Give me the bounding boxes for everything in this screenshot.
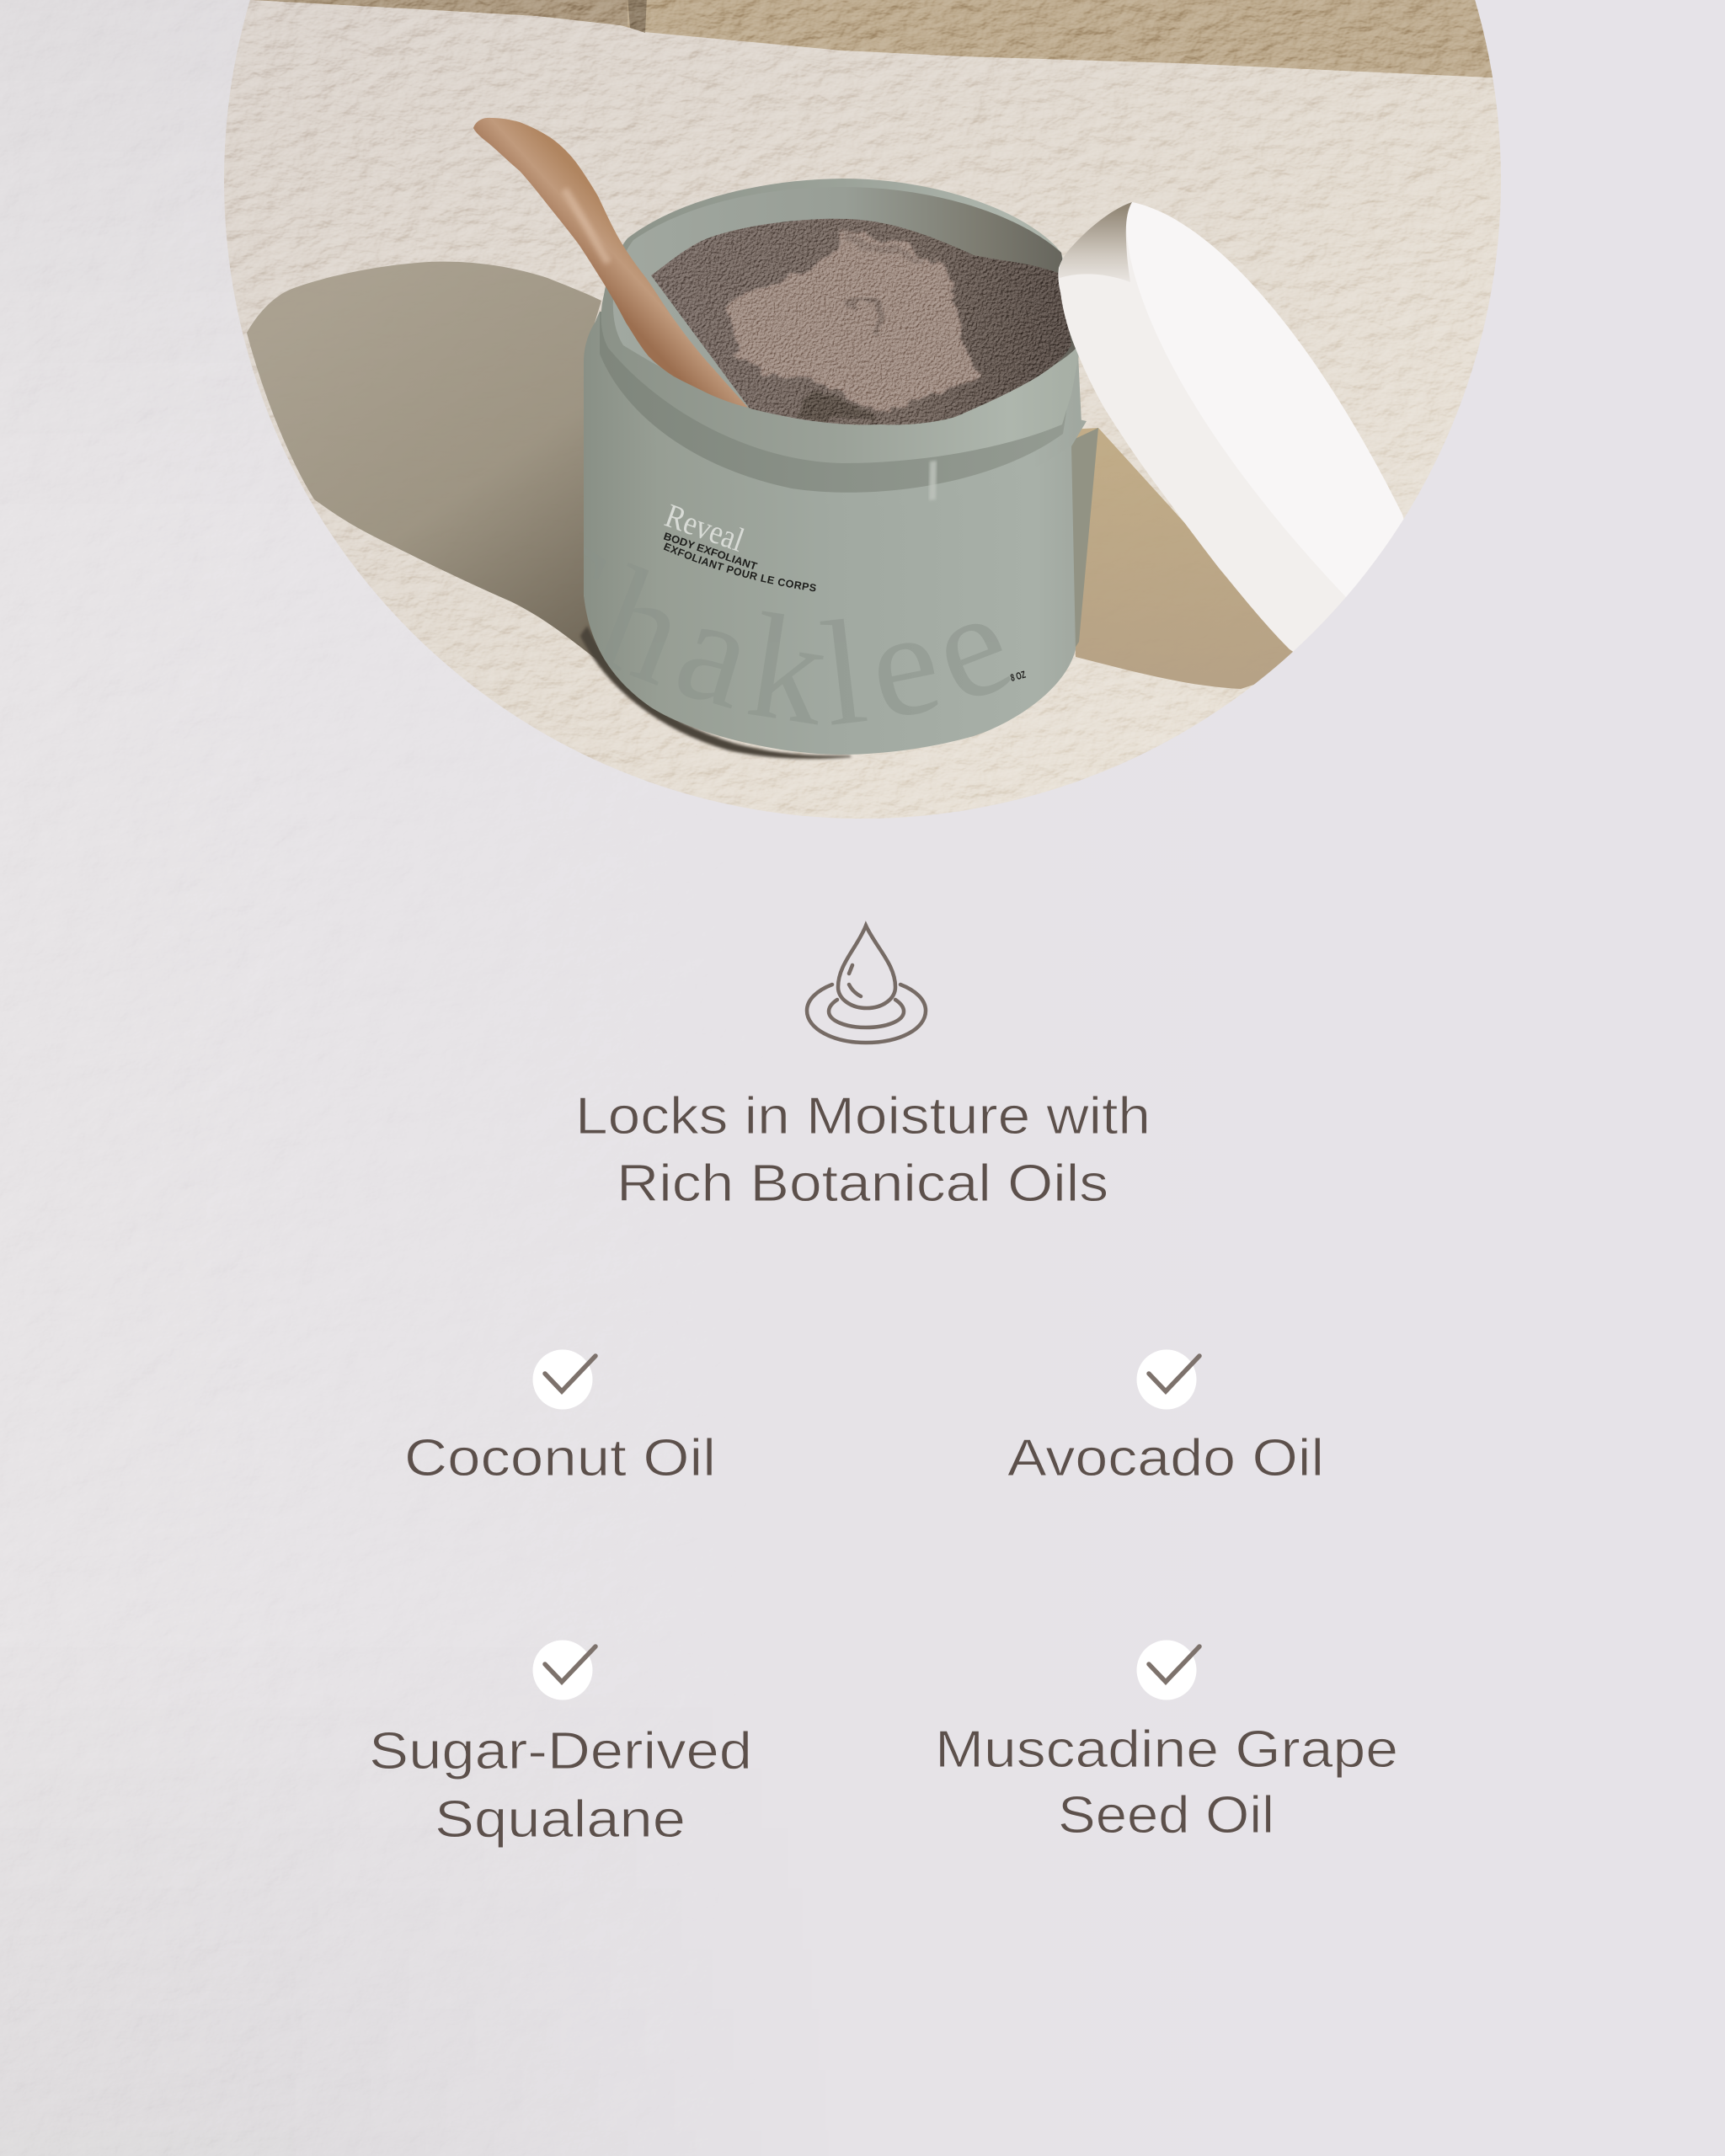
icon: check <box>1137 1641 1199 1700</box>
tan stone <box>244 0 1508 78</box>
spoon highlight <box>564 189 608 263</box>
ingredient: sugar-derived squalane: Squalane <box>435 1790 686 1849</box>
ingredient: muscadine grape seed oil <box>935 1641 1398 1844</box>
ingredient: avocado oil <box>1007 1349 1324 1487</box>
lid <box>1058 202 1449 758</box>
jar size mark: 8 OZ <box>1009 669 1027 684</box>
jar label product line 2: EXFOLIANT POUR LE CORPS <box>664 542 816 591</box>
contact shadow <box>581 627 851 758</box>
background wall <box>0 0 526 2156</box>
ingredient: sugar-derived squalane <box>369 1641 752 1849</box>
jar label product line 1: BODY EXFOLIANT <box>662 531 759 573</box>
scrub <box>640 211 1087 438</box>
icon: check <box>532 1641 595 1700</box>
icon: check <box>1137 1349 1199 1410</box>
jar label Reveal: Reveal <box>660 496 750 559</box>
heading: Rich Botanical Oils <box>617 1155 1108 1213</box>
neck band <box>584 312 1081 506</box>
cast shadow right <box>1075 428 1293 689</box>
lid shaded top edge <box>1059 202 1132 282</box>
heading: Locks in Moisture with <box>575 1087 1151 1145</box>
jar wordmark: Shaklee <box>603 611 1011 724</box>
jar <box>473 118 1098 755</box>
ingredient: sugar-derived squalane: Sugar-Derived <box>369 1722 752 1780</box>
icon: check <box>532 1349 595 1410</box>
photo floor <box>219 0 1508 825</box>
jar body <box>584 318 1087 755</box>
ingredient: muscadine grape seed oil: Muscadine Grape <box>935 1721 1398 1779</box>
ingredient: coconut oil <box>404 1349 716 1487</box>
spoon <box>473 118 748 408</box>
ingredient: avocado oil: Avocado Oil <box>1007 1429 1324 1487</box>
product photo circle <box>224 0 1501 819</box>
ingredient: coconut oil: Coconut Oil <box>404 1429 716 1487</box>
lid top face <box>1126 202 1449 674</box>
jar back strip in shade <box>1071 428 1098 647</box>
jar lip <box>601 179 1082 463</box>
floor texture <box>219 0 1508 825</box>
icon: oil drop with ripples <box>807 926 926 1043</box>
heading <box>575 1087 1151 1213</box>
jar inner wall <box>613 187 1076 424</box>
ingredient: muscadine grape seed oil: Seed Oil <box>1058 1786 1274 1844</box>
cast shadow left <box>247 262 606 665</box>
